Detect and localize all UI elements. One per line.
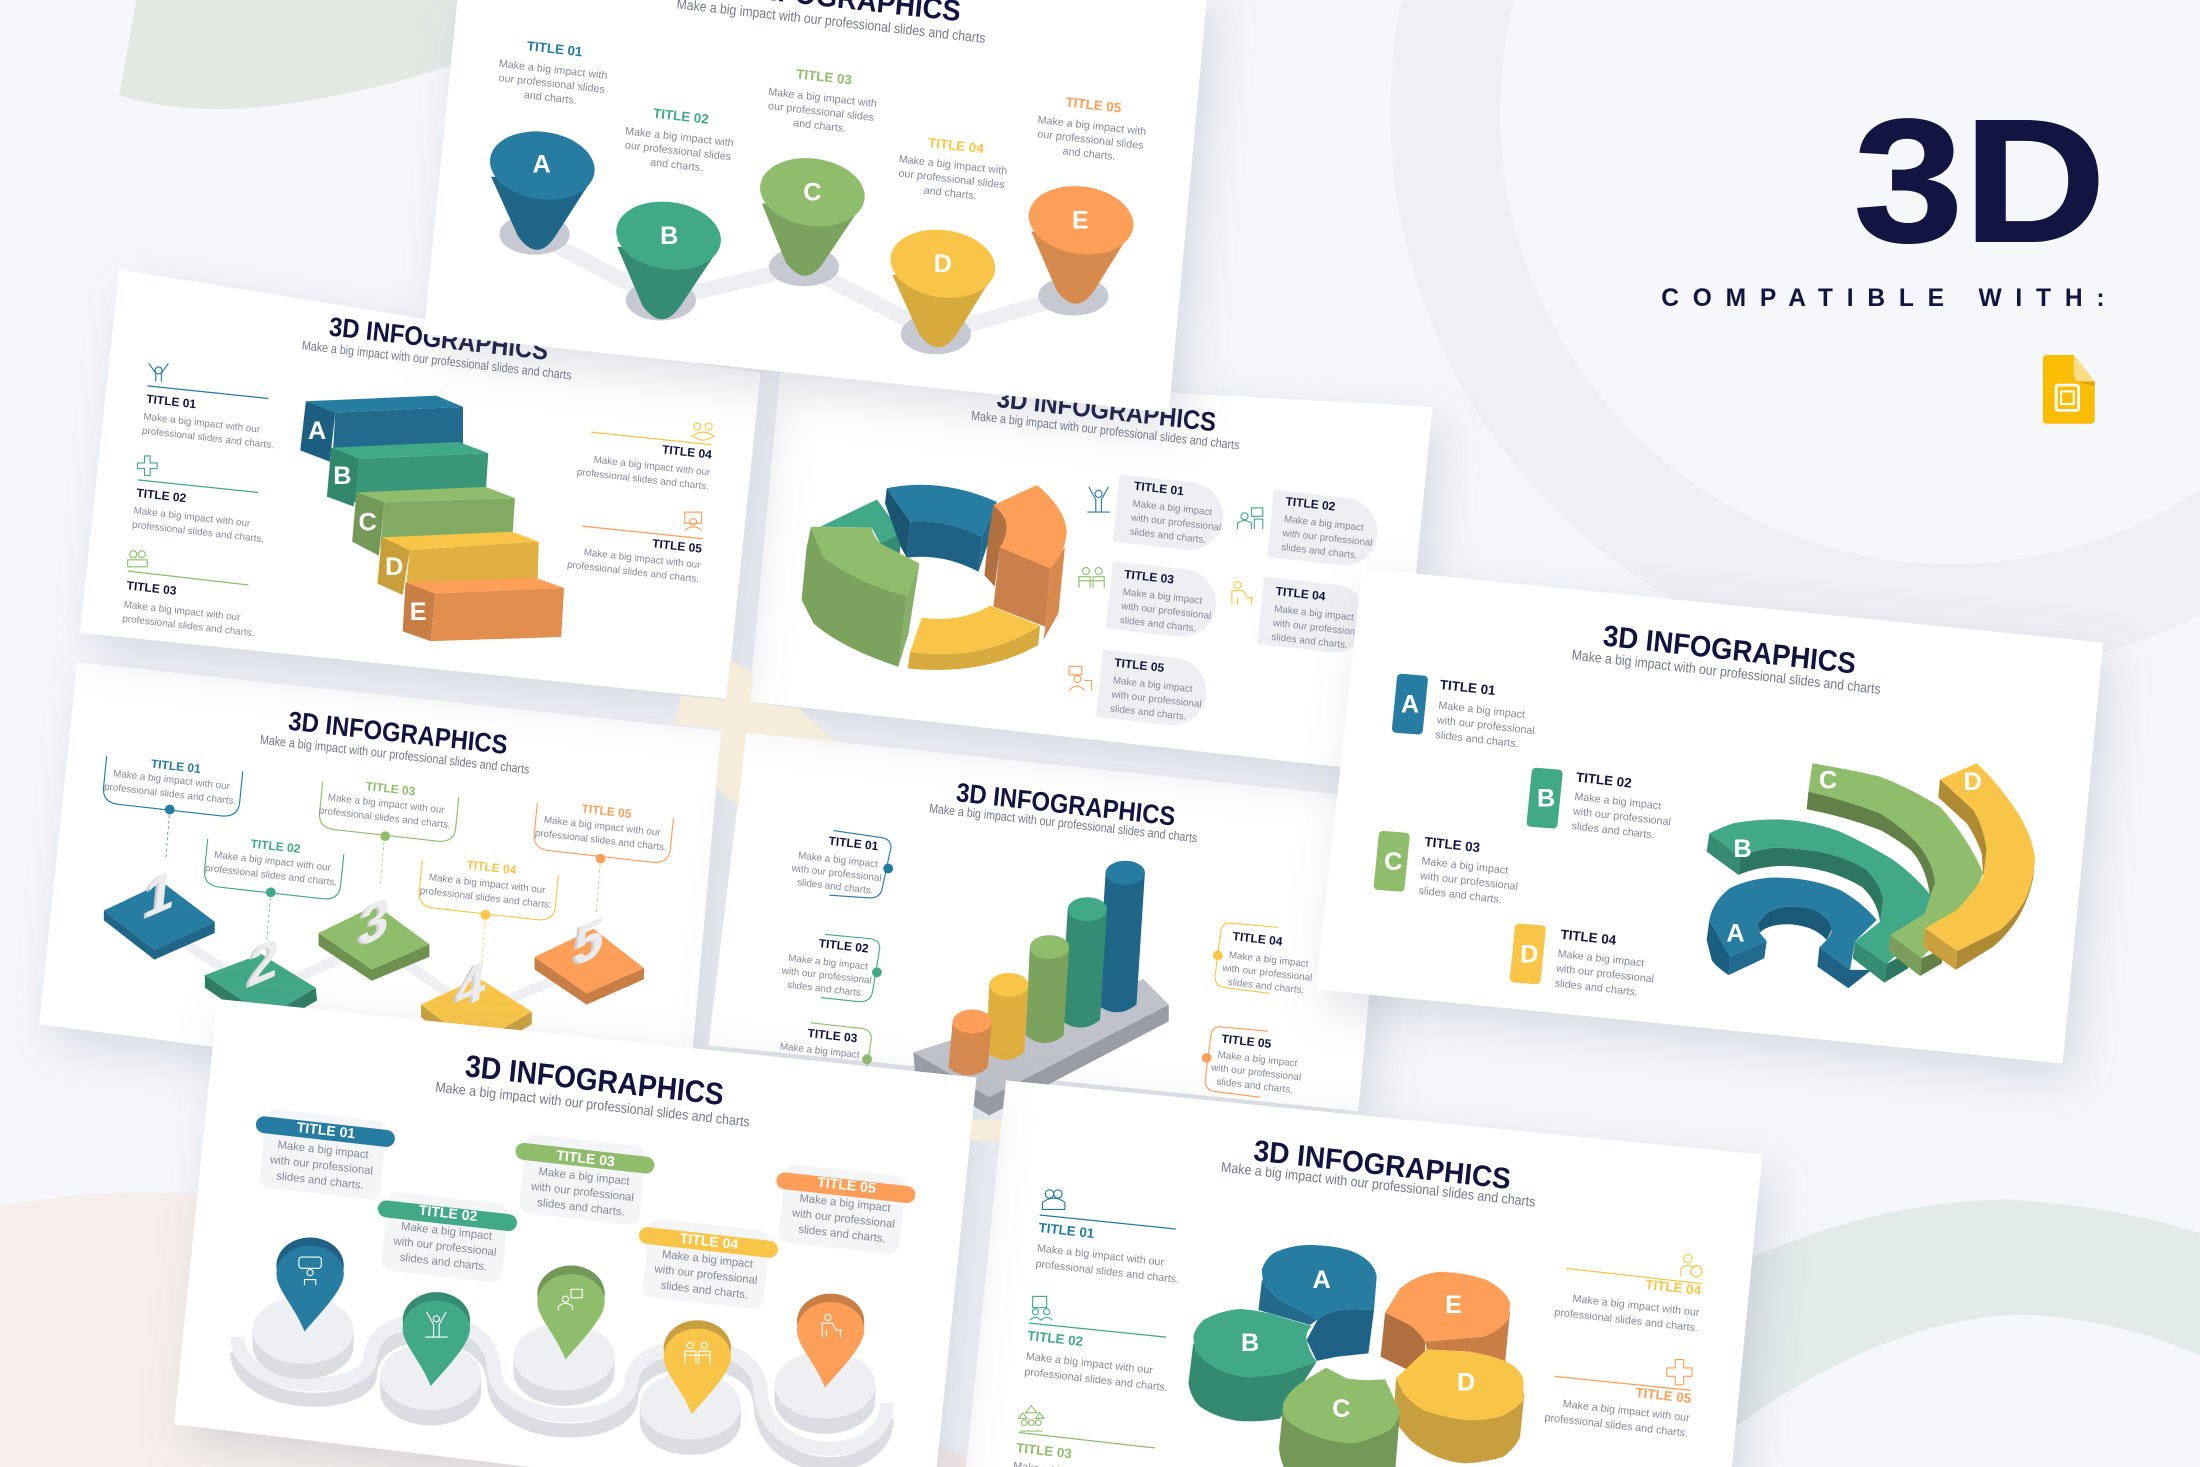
callout 03 [318, 779, 459, 887]
text 04 [895, 135, 1008, 205]
text 03: and charts. [793, 117, 847, 135]
step E [403, 578, 564, 641]
item 03 [1013, 1406, 1155, 1467]
platform 2: 2 [243, 927, 279, 1002]
connector path [535, 234, 1073, 334]
callout 02: Make a big impact with our [214, 850, 332, 874]
platform 4 [421, 948, 532, 1058]
text 01: our professional slides [498, 72, 605, 96]
cone B: B [660, 222, 678, 250]
background shape: peach blob [0, 1192, 982, 1467]
card 04 [638, 1218, 779, 1310]
pedestal 4 [640, 1372, 741, 1455]
pedestal 5 [774, 1351, 876, 1434]
item 04: professional slides and charts. [576, 467, 709, 493]
slide: map pins [174, 999, 977, 1467]
text 01: and charts. [523, 89, 577, 107]
slide title: 3D INFOGRAPHICS [1252, 1134, 1512, 1196]
label card 03: with our professional [1120, 601, 1212, 622]
item A: with our professional [1435, 714, 1535, 737]
label 02: TITLE 02 [818, 936, 870, 956]
slide: petals [960, 1080, 1762, 1467]
slide: cylinder bars [709, 732, 1388, 1115]
text 05: TITLE 05 [1065, 94, 1122, 116]
text 04: our professional slides [898, 168, 1005, 191]
item 02: TITLE 02 [136, 486, 187, 505]
label card 04 [1257, 577, 1371, 656]
item B: slides and charts. [1571, 820, 1655, 841]
callout 05: professional slides and charts. [534, 828, 667, 854]
platform 5: 5 [568, 906, 604, 981]
step B: B [333, 462, 351, 490]
label card 02: with our professional [1281, 528, 1373, 549]
item 02: Make a big impact with our [1025, 1351, 1154, 1377]
callout 01: TITLE 01 [150, 757, 202, 776]
card 03 [515, 1134, 655, 1226]
arc A: A [1726, 919, 1745, 947]
card 01: with our professional [269, 1154, 373, 1177]
text 05: and charts. [1062, 145, 1116, 163]
petal D: D [1457, 1368, 1475, 1396]
card 02: with our professional [392, 1235, 497, 1259]
label card 05: Make a big impact [1112, 675, 1193, 695]
card 03: TITLE 03 [556, 1147, 616, 1169]
callout 05: Make a big impact with our [543, 815, 662, 839]
item C: TITLE 03 [1424, 834, 1481, 855]
item A: slides and charts. [1435, 729, 1519, 750]
label card 01 [1113, 474, 1226, 554]
item D: TITLE 04 [1560, 927, 1617, 948]
step A: A [308, 417, 326, 445]
label card 02: Make a big impact [1283, 514, 1364, 534]
text 04: TITLE 04 [927, 135, 985, 156]
item B: B [1537, 785, 1555, 813]
label 02: Make a big impact [788, 953, 869, 973]
slide title: 3D INFOGRAPHICS [328, 311, 550, 366]
item 05: TITLE 05 [652, 536, 703, 556]
card 05: slides and charts. [798, 1224, 886, 1245]
step C: C [358, 508, 377, 536]
text 02: Make a big impact with [625, 125, 734, 149]
label 04: slides and charts. [1227, 977, 1305, 996]
cone D: D [934, 250, 952, 278]
slide title: 3D INFOGRAPHICS [1602, 620, 1857, 681]
callout 03: TITLE 03 [365, 779, 416, 799]
label card 01: slides and charts. [1129, 527, 1207, 546]
platform 1 [104, 856, 215, 960]
platform 4: 4 [453, 948, 489, 1023]
text 04: Make a big impact with [898, 153, 1008, 177]
slide subtitle: Make a big impact with our professional slides and charts [929, 801, 1198, 845]
item C: Make a big impact [1421, 855, 1509, 877]
petal A [1258, 1245, 1377, 1361]
cone E: E [1072, 207, 1089, 235]
label card 05 [1096, 650, 1209, 729]
cone C: C [803, 179, 822, 207]
bar chart [948, 861, 1145, 1075]
label card 05: TITLE 05 [1114, 655, 1165, 675]
item 02: professional slides and charts. [1024, 1366, 1168, 1394]
item 01: TITLE 01 [1038, 1220, 1096, 1241]
item 05: professional slides and charts. [1544, 1412, 1689, 1440]
slide: numbered platforms [39, 662, 721, 1108]
item 05 [567, 512, 703, 585]
item B: TITLE 02 [1575, 770, 1632, 791]
step B [327, 442, 488, 506]
text 01 [496, 38, 608, 110]
item D: slides and charts. [1554, 977, 1638, 999]
label 01: Make a big impact [798, 850, 878, 870]
label card 01: with our professional [1130, 512, 1222, 534]
card 03: with our professional [529, 1181, 634, 1204]
text 03 [765, 66, 877, 138]
platform 3: 3 [357, 884, 392, 960]
item 01: Make a big impact with our [1037, 1243, 1165, 1269]
pedestal 1 [253, 1296, 354, 1379]
slide title: 3D INFOGRAPHICS [955, 777, 1177, 832]
wave track [237, 1319, 887, 1464]
label 04: TITLE 04 [1232, 929, 1283, 949]
card 02 [377, 1191, 518, 1283]
callout 04: TITLE 04 [466, 858, 517, 877]
label card 03: slides and charts. [1119, 615, 1197, 634]
label card 05: slides and charts. [1110, 703, 1187, 723]
arc C: C [1819, 766, 1837, 794]
item C: slides and charts. [1418, 885, 1502, 906]
arc B [1707, 819, 1932, 983]
callout 02: TITLE 02 [250, 837, 301, 856]
platform 3 [319, 884, 429, 981]
item B: with our professional [1571, 805, 1671, 828]
item 02 [132, 456, 266, 545]
card 01: slides and charts. [276, 1170, 364, 1192]
label 01: slides and charts. [797, 877, 874, 897]
callout 04 [418, 858, 558, 968]
slide subtitle: Make a big impact with our professional slides and charts [259, 733, 530, 777]
item B: Make a big impact [1574, 791, 1662, 812]
pin 4 [664, 1320, 731, 1414]
item 01 [1035, 1190, 1181, 1286]
cone A: A [532, 151, 551, 179]
arc A [1707, 878, 1877, 988]
slide subtitle: Make a big impact with our professional slides and charts [301, 338, 572, 383]
item 02: Make a big impact with our [133, 506, 251, 530]
label card 02: slides and charts. [1281, 542, 1358, 562]
label card 04: Make a big impact [1274, 604, 1355, 624]
platform 4: 4 [451, 949, 487, 1024]
item 03: Make a big impact with our [123, 600, 242, 624]
item 02: professional slides and charts. [132, 520, 265, 545]
step E: E [410, 598, 427, 626]
item 04: TITLE 04 [1645, 1277, 1702, 1298]
step A [300, 396, 463, 462]
card 05: Make a big impact [799, 1193, 892, 1215]
label 03 [779, 1023, 872, 1066]
label 01 [789, 831, 893, 898]
petal E: E [1445, 1291, 1462, 1319]
slide subtitle: Make a big impact with our professional slides and charts [435, 1079, 751, 1130]
donut chart [802, 485, 1067, 670]
item D: with our professional [1555, 963, 1655, 986]
label 01: with our professional [790, 863, 882, 884]
text 02: and charts. [650, 156, 704, 174]
platform 1: 1 [139, 858, 175, 933]
pin 3 [537, 1266, 605, 1360]
callout 04: professional slides and charts. [419, 885, 552, 911]
item 01: TITLE 01 [146, 392, 197, 411]
label card 01: Make a big impact [1132, 499, 1213, 518]
card 05 [776, 1163, 916, 1255]
item 02: TITLE 02 [1027, 1328, 1084, 1349]
callout 04: Make a big impact with our [428, 872, 547, 896]
petal B [1188, 1309, 1317, 1421]
slide title: 3D INFOGRAPHICS [464, 1048, 725, 1112]
text 04: and charts. [923, 185, 977, 202]
item 04 [1554, 1254, 1702, 1334]
card 03: Make a big impact [538, 1166, 631, 1188]
step D [377, 532, 539, 595]
icon: person 01 [1087, 487, 1110, 512]
slide subtitle: Make a big impact with our professional slides and charts [1571, 646, 1881, 697]
card 05: TITLE 05 [817, 1174, 877, 1196]
label 04 [1213, 923, 1314, 997]
background shape: sage wave [1684, 1200, 2200, 1467]
item 01 [141, 363, 276, 451]
item 05: TITLE 05 [1635, 1385, 1692, 1406]
text 05: our professional slides [1037, 128, 1144, 152]
label 05: TITLE 05 [1221, 1032, 1272, 1051]
label card 04: TITLE 04 [1275, 584, 1326, 603]
label 03: TITLE 03 [807, 1026, 858, 1045]
background shape: cream band in gap [970, 1120, 1002, 1141]
callout 05: TITLE 05 [581, 801, 632, 821]
callout 01: Make a big impact with our [113, 768, 231, 792]
item B [1526, 767, 1673, 843]
label 05: Make a big impact [1217, 1050, 1298, 1070]
label 03: Make a big impact [779, 1041, 860, 1061]
cone D [886, 223, 1000, 354]
petal B: B [1241, 1329, 1259, 1357]
item 05: professional slides and charts. [567, 560, 700, 585]
card 01: TITLE 01 [296, 1119, 356, 1141]
callout 01: professional slides and charts. [104, 782, 237, 807]
platform 1: 1 [142, 856, 178, 932]
slide: cones [424, 0, 1208, 412]
item 01: Make a big impact with our [143, 412, 261, 436]
background shape: ring [1390, 0, 2200, 673]
cone C [756, 152, 869, 286]
label card 03 [1106, 561, 1219, 640]
card 05: with our professional [790, 1207, 895, 1231]
item A: A [1401, 691, 1419, 719]
arc D: D [1964, 768, 1982, 796]
text 01: TITLE 01 [526, 38, 584, 59]
background shape: sage blob [119, 0, 477, 109]
label card 02 [1267, 490, 1381, 569]
item 05: Make a big impact with our [583, 547, 702, 571]
step C [352, 487, 515, 556]
icon: people 02 [1237, 508, 1263, 529]
slide subtitle: Make a big impact with our professional slides and charts [1220, 1159, 1536, 1210]
callout 03: Make a big impact with our [327, 792, 446, 816]
item 04: TITLE 04 [661, 442, 713, 462]
petal A: A [1313, 1266, 1331, 1294]
petal C [1279, 1368, 1400, 1467]
pin 2 [403, 1292, 470, 1386]
label 04: with our professional [1221, 963, 1313, 984]
item 05 [1544, 1360, 1692, 1440]
text 01: Make a big impact with [498, 58, 608, 82]
icon: people 05 [1069, 666, 1092, 690]
platform 5: 5 [571, 904, 607, 979]
label card 03: Make a big impact [1122, 587, 1203, 607]
card 01: Make a big impact [277, 1139, 370, 1161]
arc B: B [1733, 835, 1752, 863]
item 04: professional slides and charts. [1554, 1306, 1698, 1334]
item A: Make a big impact [1438, 700, 1526, 721]
text 05 [1034, 94, 1147, 166]
card 02: slides and charts. [399, 1252, 488, 1273]
label 02: slides and charts. [787, 980, 864, 999]
label card 02: TITLE 02 [1285, 494, 1336, 514]
item 01: professional slides and charts. [1035, 1258, 1180, 1286]
item D: Make a big impact [1557, 948, 1645, 970]
item D: D [1520, 940, 1538, 968]
platform 5 [535, 904, 644, 1005]
item C: C [1384, 848, 1402, 876]
step D: D [385, 553, 403, 581]
label 05: with our professional [1210, 1062, 1302, 1083]
label card 04: slides and charts. [1271, 632, 1348, 651]
text 03: Make a big impact with [768, 86, 877, 110]
callout 02: professional slides and charts. [205, 863, 338, 889]
text 03: our professional slides [767, 100, 875, 124]
slide title: 3D INFOGRAPHICS [996, 383, 1217, 437]
text 02: TITLE 02 [652, 106, 709, 127]
pedestal 2 [380, 1343, 481, 1425]
arc D [1923, 763, 2035, 970]
callout 01 [102, 756, 243, 860]
icon: Google Slides [2043, 355, 2095, 424]
item 03: professional slides and charts. [122, 614, 255, 639]
item C: with our professional [1419, 870, 1518, 893]
pin 5 [797, 1294, 864, 1388]
cone A [486, 125, 599, 255]
heading: 3D: 3D [1853, 83, 2106, 279]
card 03: slides and charts. [537, 1197, 625, 1219]
text 03: TITLE 03 [796, 66, 853, 87]
cone B [612, 195, 725, 321]
petal D [1393, 1349, 1524, 1463]
item A [1392, 673, 1537, 752]
label card 05: with our professional [1110, 689, 1202, 710]
item 03: TITLE 03 [1016, 1440, 1073, 1461]
slide: rainbow arcs [1316, 568, 2103, 1063]
label 04: Make a big impact [1228, 950, 1309, 970]
slide: donut [749, 372, 1433, 773]
label 05: slides and charts. [1216, 1077, 1293, 1096]
item 02 [1024, 1296, 1170, 1394]
label card 01: TITLE 01 [1133, 479, 1185, 498]
label 02 [779, 934, 882, 1002]
pin 1 [276, 1237, 344, 1331]
label 05 [1202, 1027, 1303, 1097]
platform 2 [205, 925, 317, 1030]
label 01: TITLE 01 [828, 834, 879, 853]
petal E [1381, 1272, 1510, 1372]
label 02: with our professional [780, 966, 872, 987]
subheading: compatible with: COMPATIBLE WITH: [1661, 285, 2105, 312]
text 02: our professional slides [624, 139, 732, 163]
item 03: TITLE 03 [126, 578, 177, 598]
bars base plate [913, 979, 1169, 1115]
label card 03: TITLE 03 [1124, 567, 1175, 587]
background shape: cream cross between slides [674, 659, 835, 806]
item 05: Make a big impact with our [1562, 1398, 1691, 1424]
connectors [159, 926, 589, 1013]
card 04: slides and charts. [660, 1280, 749, 1301]
callout 02 [203, 837, 344, 943]
text 05: Make a big impact with [1037, 114, 1147, 138]
item D [1509, 923, 1656, 1000]
card 04: TITLE 04 [679, 1230, 739, 1252]
item 04 [576, 423, 714, 493]
item 04: Make a big impact with our [1572, 1293, 1700, 1319]
card 02: TITLE 02 [418, 1202, 478, 1224]
platform 2: 2 [246, 925, 282, 1000]
slide: steps [80, 269, 760, 699]
arc C [1807, 763, 1983, 976]
icon: desk 04 [1232, 582, 1253, 605]
item 04: Make a big impact with our [593, 455, 711, 479]
label card 04: with our professional [1271, 618, 1363, 639]
card 02: Make a big impact [400, 1221, 493, 1243]
slide subtitle: Make a big impact with our professional slides and charts [971, 409, 1240, 453]
callout 03: professional slides and charts. [318, 805, 451, 831]
cone E [1024, 180, 1138, 316]
item C [1373, 831, 1520, 908]
item A: TITLE 01 [1439, 677, 1497, 698]
pedestal 3 [514, 1323, 615, 1406]
petal C: C [1332, 1395, 1350, 1423]
platform 3: 3 [354, 886, 390, 961]
card 01 [255, 1108, 396, 1200]
item 03 [122, 551, 256, 639]
callout 05 [533, 801, 673, 912]
item 01: professional slides and charts. [141, 426, 274, 451]
icon: people 03 [1079, 568, 1104, 588]
text 02 [622, 106, 734, 177]
card 04: with our professional [653, 1263, 758, 1287]
slide title: 3D INFOGRAPHICS [287, 706, 509, 760]
card 04: Make a big impact [661, 1249, 754, 1271]
